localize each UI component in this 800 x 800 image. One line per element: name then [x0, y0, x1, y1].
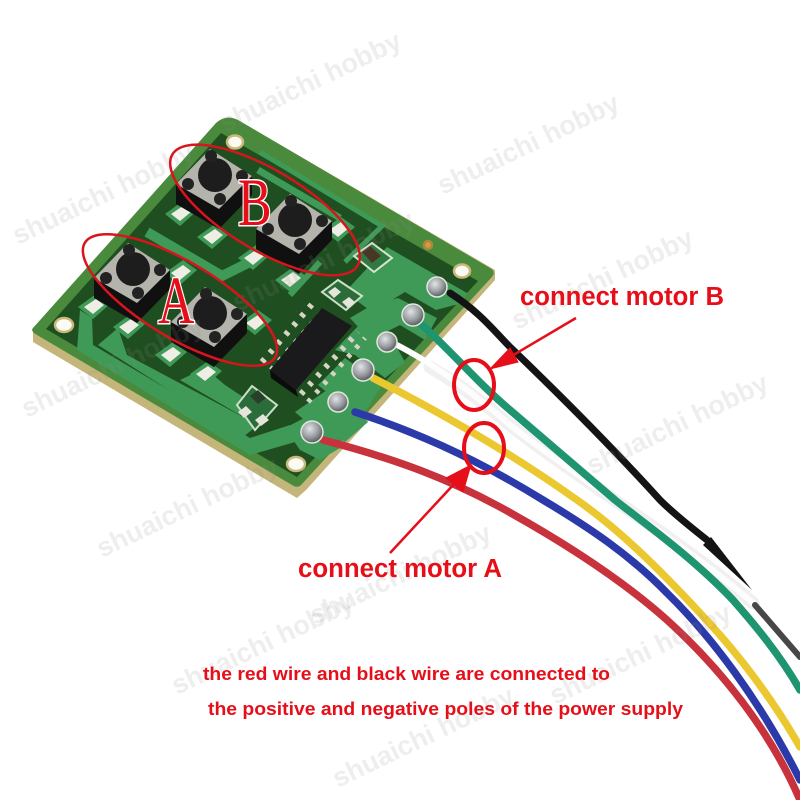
watermarks: shuaichi hobby [433, 87, 624, 200]
note: power supply wires: the positive and negative poles of the power supply [208, 698, 684, 719]
wires [323, 293, 800, 800]
blue wire [355, 412, 800, 780]
letter B: B [238, 165, 272, 240]
watermarks: shuaichi hobby [582, 367, 773, 480]
letter A: A [158, 263, 194, 338]
watermarks: shuaichi hobby [92, 450, 283, 563]
panel: circuit board [32, 118, 495, 498]
solder joints [301, 277, 447, 443]
circle: motor A wires [464, 423, 504, 473]
solder pads [78, 201, 355, 386]
button pair B [176, 149, 332, 274]
white wire [397, 345, 800, 657]
button pair A [94, 243, 247, 367]
chip [262, 302, 365, 402]
watermarks: shuaichi hobby [228, 204, 419, 317]
green wire [420, 323, 800, 690]
black wire [450, 293, 752, 590]
circle: motor B wires [454, 360, 494, 410]
watermarks: shuaichi hobby [215, 25, 406, 138]
watermarks: shuaichi hobby [328, 680, 519, 793]
watermarks: shuaichi hobby [8, 137, 199, 250]
label: connect motor A: connect motor A [298, 555, 502, 583]
board traces [77, 152, 467, 460]
watermarks: shuaichi hobby [545, 597, 736, 710]
mounting holes [55, 136, 470, 471]
arrow: motor B [490, 318, 576, 369]
callout ellipse: group A [65, 210, 295, 390]
small components [237, 243, 392, 430]
yellow wire [373, 378, 800, 747]
watermarks: shuaichi hobby [305, 517, 496, 630]
callout ellipse: group B [152, 120, 378, 300]
note: power supply wires: the red wire and black wire are connected to [203, 663, 610, 684]
watermarks: shuaichi hobby [167, 587, 358, 700]
note: power supply wires [203, 663, 684, 719]
red wire [323, 440, 800, 800]
tactile buttons [94, 149, 332, 367]
watermarks: shuaichi hobby [507, 222, 698, 335]
watermarks: shuaichi hobby [17, 310, 208, 423]
arrow: motor A [390, 465, 471, 553]
label: connect motor B: connect motor B [520, 283, 724, 311]
